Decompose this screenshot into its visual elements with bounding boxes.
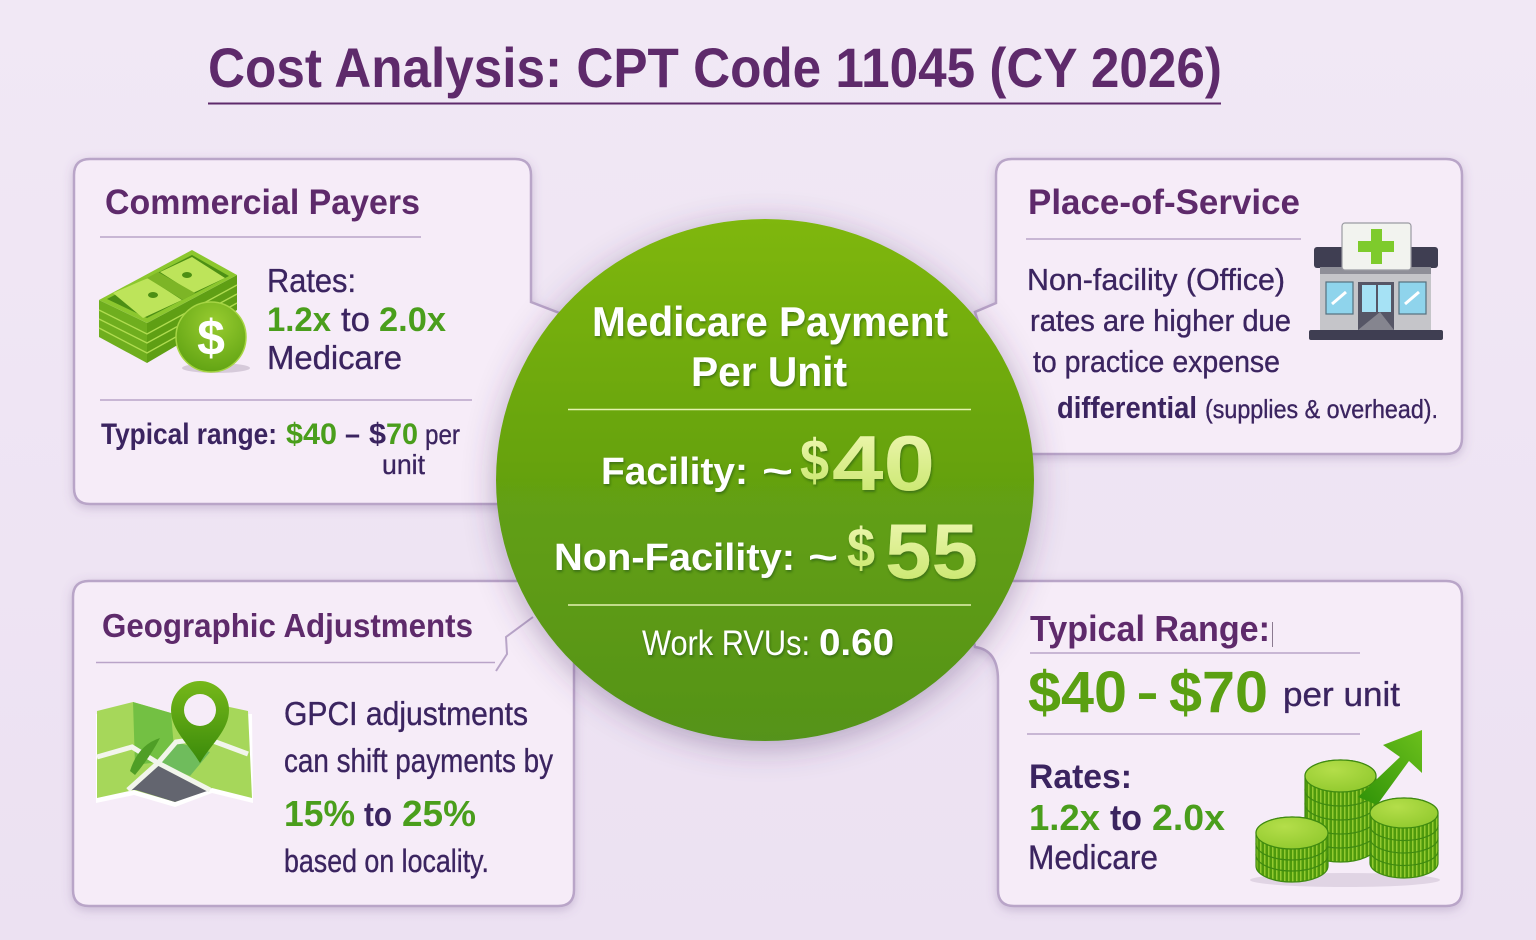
text: commercial typical range: $ — [369, 418, 386, 451]
text: geographic body — [284, 695, 553, 879]
stat: non-facility: Non-Facility: — [554, 537, 795, 579]
heading: geographic adjustments: Geographic Adjustments — [102, 607, 473, 644]
panel: typical range — [960, 581, 1462, 906]
icon: stack of cash with dollar coin: $ — [197, 310, 225, 366]
text: place of service body: to practice expense — [1033, 344, 1280, 379]
stat: facility: 40 — [832, 419, 935, 507]
text: typical rates: 2.0x — [1152, 797, 1225, 838]
text: commercial rates: Rates: — [267, 262, 356, 299]
heading: medicare payment per unit: Medicare Payment — [592, 298, 948, 345]
arrow: rising — [1358, 730, 1422, 805]
text: typical rates: Rates: — [1029, 758, 1132, 796]
text: geographic body: based on locality. — [284, 843, 489, 879]
heading: medicare payment per unit: Per Unit — [691, 348, 847, 395]
text: commercial typical range: Typical range: — [101, 418, 277, 451]
text: commercial typical range: $40 — [286, 418, 337, 451]
panel: place of service — [975, 159, 1462, 454]
text: range value: – — [1138, 660, 1157, 725]
text: commercial rates: 1.2x — [267, 301, 331, 339]
text: commercial rates: Medicare — [267, 339, 402, 376]
text: commercial rates: 2.0x — [379, 301, 446, 339]
stat: facility: $ — [800, 428, 829, 493]
icon: map with location pin — [96, 681, 253, 807]
stat: facility: ~ — [762, 451, 793, 493]
panel: geographic adjustments — [73, 581, 574, 906]
text: place of service body: differential — [1057, 390, 1197, 425]
icon: clinic building — [1309, 223, 1443, 340]
icon: stack of cash with dollar coin — [99, 250, 250, 373]
text: commercial typical range — [101, 418, 460, 480]
heading: medicare payment per unit — [592, 298, 948, 395]
text: place of service body: Non-facility (Office) — [1027, 262, 1285, 297]
text: commercial typical range: unit — [382, 449, 425, 480]
stat: facility: Facility: — [601, 451, 748, 493]
text: typical rates: to — [1110, 797, 1142, 838]
stat: non-facility: 55 — [885, 507, 978, 595]
text: typical rates — [1028, 758, 1225, 877]
text: typical rates: Medicare — [1028, 839, 1158, 877]
stat: non-facility: $ — [847, 516, 875, 579]
text: geographic body: GPCI adjustments — [284, 695, 528, 732]
heading: commercial payers: Commercial Payers — [105, 183, 420, 222]
text: commercial typical range: – — [345, 418, 360, 451]
text: place of service body: rates are higher due — [1030, 303, 1291, 338]
text: range value: $70 — [1169, 660, 1268, 725]
text: commercial typical range: per — [425, 419, 460, 450]
icon: coin stacks with rising arrow — [1250, 730, 1440, 887]
heading: place of service: Place-of-Service — [1028, 183, 1300, 222]
panel: commercial payers — [74, 159, 562, 504]
coin stack: middle — [1305, 760, 1376, 862]
stat: non-facility: ~ — [808, 537, 838, 579]
text: range value: per unit — [1283, 676, 1401, 714]
coin stack: left — [1256, 817, 1328, 882]
text: place of service body: (supplies & overhead). — [1205, 394, 1438, 424]
text: range value: $40 — [1028, 660, 1127, 725]
stat: work RVUs: 0.60 — [819, 622, 894, 663]
stat: work RVUs: Work RVUs: — [642, 624, 810, 663]
heading: typical range: Typical Range: — [1030, 608, 1270, 649]
text: commercial rates — [267, 262, 446, 376]
title: Cost Analysis: CPT Code 11045 (CY 2026) — [208, 36, 1222, 99]
text: geographic body: to — [364, 796, 392, 834]
text: geographic body: can shift payments by — [284, 742, 553, 779]
stat: non-facility — [554, 507, 978, 595]
stat: facility — [601, 419, 935, 507]
text: typical rates: 1.2x — [1029, 797, 1100, 838]
text: place of service body — [1027, 262, 1438, 425]
text: geographic body: 15% — [284, 793, 355, 834]
text: range value — [1028, 660, 1401, 725]
text: commercial typical range: 70 — [386, 418, 418, 451]
panel: central Medicare payment circle — [496, 219, 1034, 741]
coin stack: right — [1370, 798, 1438, 878]
text: geographic body: 25% — [402, 793, 476, 834]
text: commercial rates: to — [341, 301, 370, 339]
